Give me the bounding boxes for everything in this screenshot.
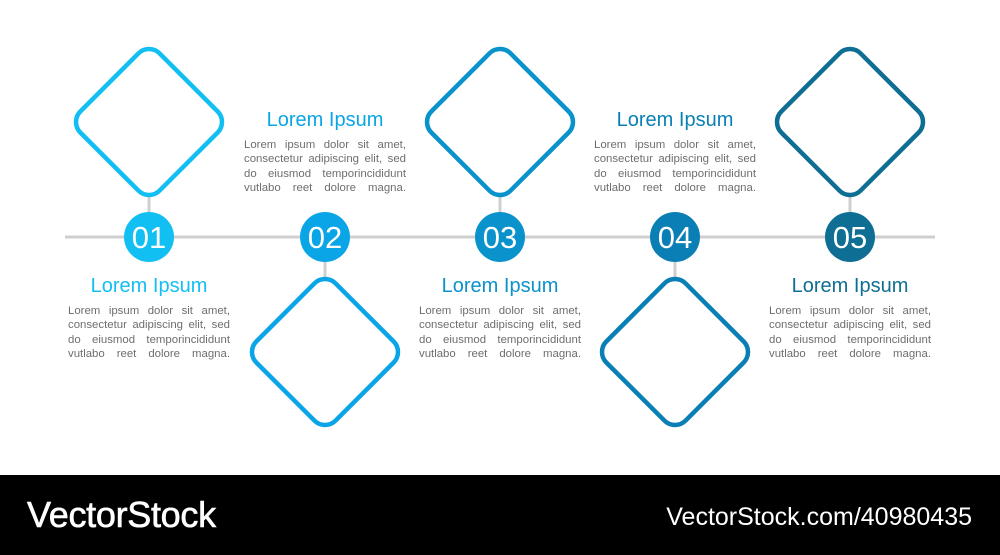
- footer url: VectorStock.com/40980435: [666, 503, 972, 531]
- text 01: Lorem Ipsum: [91, 275, 207, 297]
- text 01: [68, 275, 230, 360]
- step 03: 03: [483, 220, 517, 255]
- step 04: [596, 212, 754, 431]
- text 01: Lorem ipsum dolor sit amet, consectetur adipiscing elit, sed do eiusmod temporincididunt vutlabo reet dolore magna.: [68, 305, 230, 360]
- footer logo: VectorStock: [27, 494, 216, 535]
- text 03: [419, 275, 581, 360]
- footer bar: [0, 475, 1000, 555]
- step 04: 04: [658, 220, 692, 255]
- text 05: Lorem ipsum dolor sit amet, consectetur adipiscing elit, sed do eiusmod temporincididunt vutlabo reet dolore magna.: [769, 305, 931, 360]
- text 04: [594, 109, 756, 194]
- text 05: Lorem Ipsum: [792, 275, 908, 297]
- text 02: [244, 109, 406, 194]
- step 01: [70, 43, 228, 262]
- text 04: Lorem ipsum dolor sit amet, consectetur adipiscing elit, sed do eiusmod temporincididunt vutlabo reet dolore magna.: [594, 139, 756, 194]
- text 03: Lorem ipsum dolor sit amet, consectetur adipiscing elit, sed do eiusmod temporincididunt vutlabo reet dolore magna.: [419, 305, 581, 360]
- step 05: [771, 43, 929, 262]
- step 05: 05: [833, 220, 867, 255]
- text 02: Lorem ipsum dolor sit amet, consectetur adipiscing elit, sed do eiusmod temporincididunt vutlabo reet dolore magna.: [244, 139, 406, 194]
- step 03: [421, 43, 579, 262]
- text 05: [769, 275, 931, 360]
- text 04: Lorem Ipsum: [617, 109, 733, 131]
- step 01: 01: [132, 220, 166, 255]
- text 02: Lorem Ipsum: [267, 109, 383, 131]
- step 02: 02: [308, 220, 342, 255]
- text 03: Lorem Ipsum: [442, 275, 558, 297]
- step 02: [246, 212, 404, 431]
